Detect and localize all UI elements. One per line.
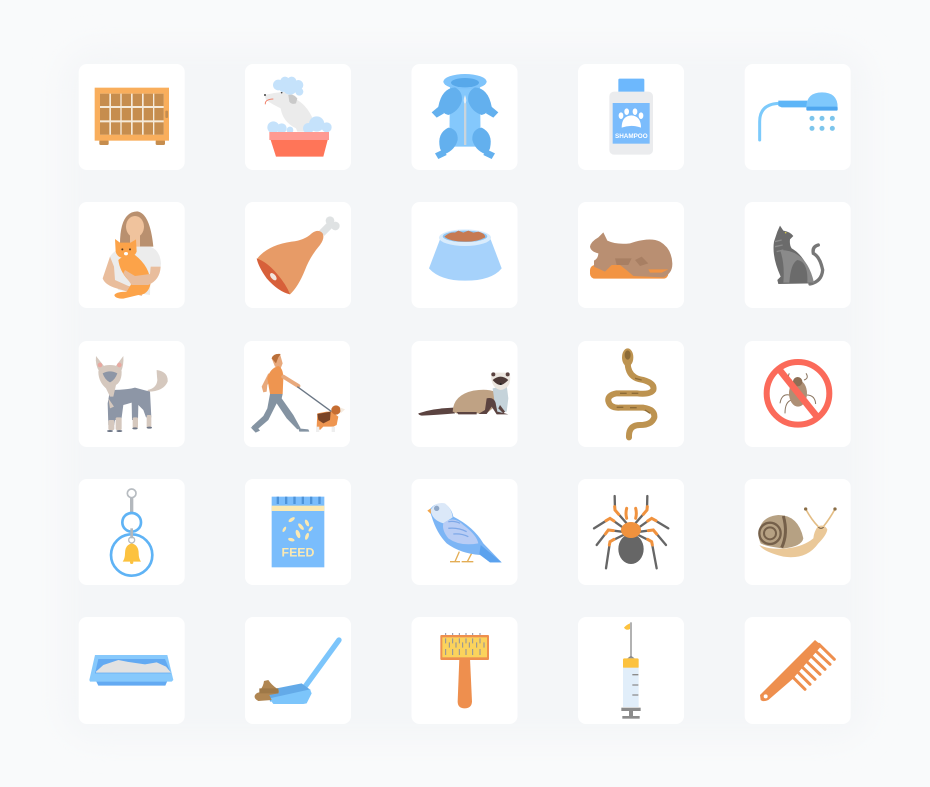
panel: budgie (412, 479, 518, 585)
panel: woman holding cat (79, 202, 185, 308)
panel: comb (745, 617, 851, 724)
panel: no ticks (745, 341, 851, 447)
panel: syringe (578, 617, 684, 724)
icon: cage (95, 88, 169, 145)
panel: pet suit (412, 64, 518, 170)
panel: grey cat (745, 202, 851, 308)
icon: shower head (760, 92, 838, 140)
panel: cage (79, 64, 185, 170)
icon: snake (608, 348, 654, 437)
icon: shampoo bottle: SHAMPOO (615, 133, 648, 140)
icon: snail (759, 507, 837, 557)
panel: snake (578, 341, 684, 447)
panel: litter tray (79, 617, 185, 724)
icon: blue budgerigar (427, 503, 502, 562)
icon: tick prohibited (767, 362, 829, 425)
icon: ham leg (257, 216, 340, 294)
icon: cat on mat (590, 232, 672, 279)
icon: tarantula spider (594, 496, 668, 568)
icon: person walking dog (251, 354, 345, 433)
panel: bell toy (79, 479, 185, 585)
icon: cat litter tray (89, 655, 173, 686)
panel: slicker brush (412, 617, 518, 724)
panel: snail (745, 479, 851, 585)
icon: grooming brush (440, 633, 489, 708)
panel: ferret (412, 341, 518, 447)
panel: pooper scoop (245, 617, 351, 724)
panel: dog walker (244, 341, 350, 447)
panel: shower (745, 64, 851, 170)
icon: sitting grey cat (774, 226, 823, 284)
icon: Chinese crested dog (96, 356, 168, 432)
icon: syringe (621, 622, 641, 719)
icon: ferret (418, 372, 510, 416)
icon: feed bag: FEED (282, 546, 315, 560)
panel: shampoo (578, 64, 684, 170)
panel: feed bag (245, 479, 351, 585)
panel: poodle bath (245, 64, 351, 170)
icon: poodle in tub (264, 77, 332, 157)
icon: scoop and droppings (255, 640, 339, 704)
panel: lying cat (578, 202, 684, 308)
icon: hanging ring toy with bell (111, 489, 152, 576)
icon: pet food bowl (429, 229, 502, 281)
panel: tarantula (578, 479, 684, 585)
panel: food bowl (412, 202, 518, 308)
panel: crested dog (79, 341, 185, 447)
panel: ham (245, 202, 351, 308)
icon: blue hooded suit (432, 74, 498, 159)
icon: woman and cat (103, 211, 161, 299)
icon: wide-tooth comb (760, 640, 834, 701)
